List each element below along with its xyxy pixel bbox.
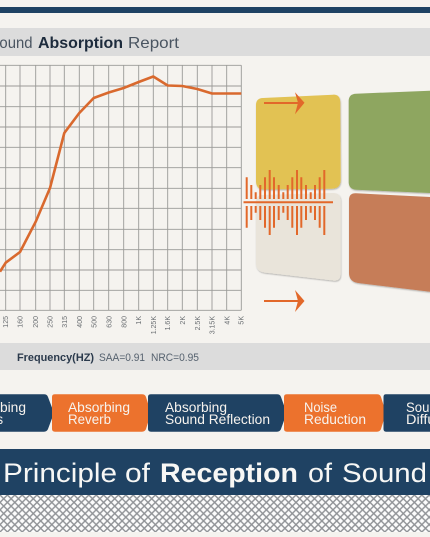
icon: top arrow xyxy=(264,92,304,114)
title text: of xyxy=(308,458,333,488)
step: sound diffusion (clipped) xyxy=(384,394,430,432)
report heading: Report xyxy=(128,35,180,52)
title text: Sound xyxy=(342,458,427,488)
frequency text: NRC=0.95 xyxy=(151,352,199,364)
step: noise reduction xyxy=(284,394,386,432)
report heading: Absorption xyxy=(38,35,123,52)
step: absorbing reverb xyxy=(52,394,151,432)
mesh texture strip xyxy=(0,495,430,532)
frequency text: Frequency(HZ) xyxy=(17,352,94,364)
icon: bottom arrow xyxy=(264,290,304,312)
frequency axis labels: 4K xyxy=(224,316,231,325)
process steps xyxy=(0,394,430,432)
frequency axis labels: 2K xyxy=(180,316,187,325)
absorption curve xyxy=(0,76,241,272)
panel: terracotta xyxy=(349,193,430,292)
icon: sound wave xyxy=(244,170,333,235)
frequency axis labels: 200 xyxy=(33,316,40,328)
step: absorbing sound reflection: Absorbing xyxy=(165,400,227,415)
panel: green xyxy=(349,91,430,193)
frequency axis labels: 315 xyxy=(62,316,69,328)
top navy bar xyxy=(0,7,430,13)
step: absorbing (clipped) xyxy=(0,394,54,432)
step: noise reduction: Reduction xyxy=(304,412,366,427)
frequency axis labels: 400 xyxy=(77,316,84,328)
step: absorbing reverb: Reverb xyxy=(68,412,111,427)
title text: Reception xyxy=(160,458,298,488)
frequency text: SAA=0.91 xyxy=(99,352,145,364)
title banner xyxy=(0,449,430,495)
acoustic panels illustration xyxy=(244,91,430,312)
frequency axis labels: 250 xyxy=(47,316,54,328)
step: absorbing sound reflection: Sound Reflection xyxy=(165,412,270,427)
step: absorbing sound reflection xyxy=(148,394,287,432)
frequency axis labels: 5K xyxy=(238,316,245,325)
panel: yellow xyxy=(256,95,341,190)
frequency axis labels: 160 xyxy=(17,316,24,328)
frequency axis labels: 3.15K xyxy=(209,316,216,334)
frequency axis labels xyxy=(3,316,245,334)
step: absorbing reverb: Absorbing xyxy=(68,400,130,415)
frequency axis labels: 1K xyxy=(136,316,143,325)
frequency axis labels: 1.6K xyxy=(165,316,172,330)
frequency axis labels: 500 xyxy=(91,316,98,328)
frequency axis labels: 800 xyxy=(121,316,128,328)
panel: cream xyxy=(256,193,341,281)
frequency band xyxy=(0,343,430,370)
title text: Principle xyxy=(3,458,117,488)
frequency axis labels: 2.5K xyxy=(195,316,202,330)
frequency axis labels: 630 xyxy=(106,316,113,328)
report heading band xyxy=(0,28,430,56)
step: noise reduction: Noise xyxy=(304,400,337,415)
title text: of xyxy=(125,458,151,488)
frequency axis labels: 1.25K xyxy=(151,316,158,334)
frequency axis labels: 125 xyxy=(3,316,10,328)
absorption line chart xyxy=(0,65,245,334)
